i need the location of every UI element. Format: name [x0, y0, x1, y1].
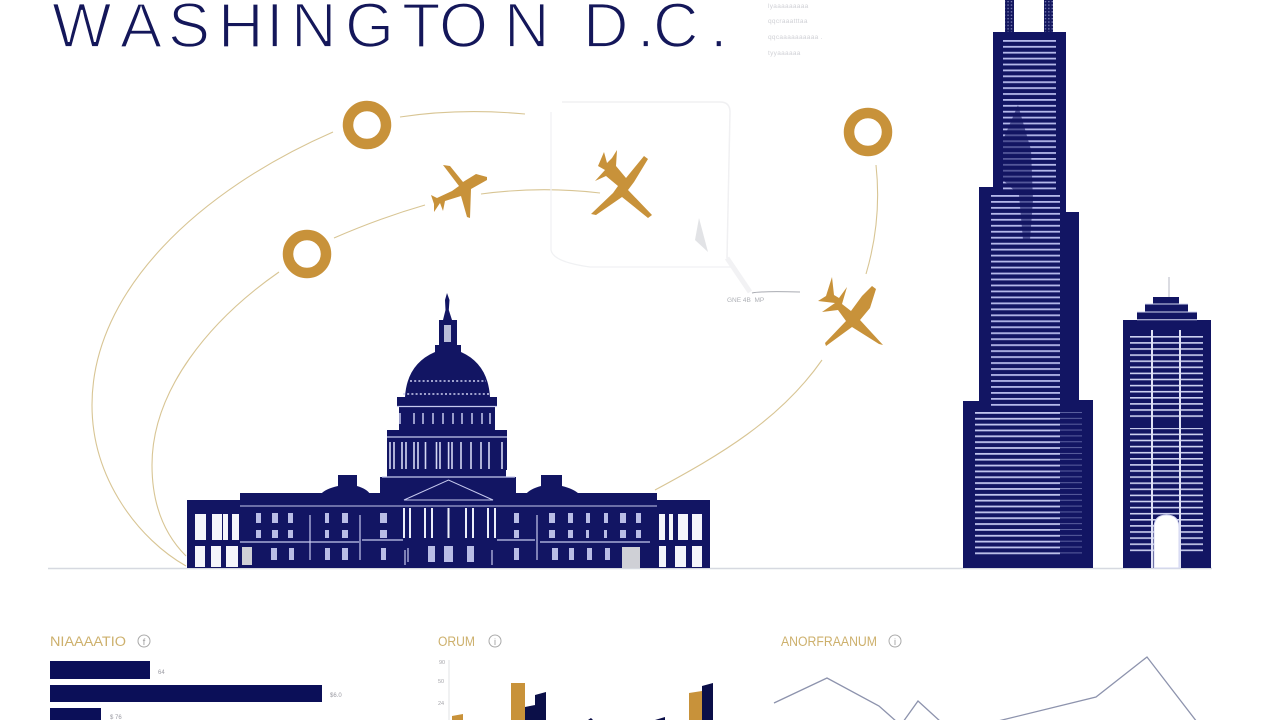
grey door blocks [242, 547, 640, 568]
icon: airplane in card [591, 150, 652, 218]
panel: column chart middle [438, 634, 713, 720]
axis: 50 [438, 679, 444, 685]
axis: 24 [438, 701, 444, 707]
shaded floors [1060, 412, 1082, 558]
drum and colonnades [380, 407, 516, 493]
panel: line chart right [774, 634, 1197, 720]
axis [438, 660, 449, 720]
side domes [321, 475, 370, 494]
tall tower [963, 0, 1093, 568]
callout card [551, 102, 800, 304]
stepped crown [1123, 297, 1211, 568]
tower silhouette [963, 32, 1093, 568]
info icon: i [494, 637, 496, 647]
text block: faint notes [768, 3, 823, 57]
line series [774, 657, 1197, 720]
portico columns [404, 508, 495, 538]
statue and lantern [439, 293, 457, 345]
info icon: i [894, 637, 896, 647]
bar values [110, 670, 342, 720]
gold columns [452, 683, 702, 720]
bar values: $6.0 [330, 693, 342, 699]
capitol building [187, 293, 710, 568]
icon: ring marker left [288, 235, 326, 273]
tower reflection [1003, 105, 1033, 240]
axis: 90 [439, 660, 445, 666]
upper floors [1003, 40, 1056, 190]
info icon: f [143, 637, 146, 647]
arch doorway [1154, 515, 1179, 568]
info icon [489, 635, 501, 647]
heading: ORUM [438, 634, 475, 649]
dome [397, 345, 497, 406]
middle floors [991, 195, 1060, 407]
heading: NIAAAATIO [50, 634, 126, 649]
callout card: GNE 4B MP [727, 297, 764, 304]
pediment [404, 480, 493, 500]
lower floors [975, 412, 1060, 558]
flight route arcs [92, 112, 878, 566]
small tower [1123, 277, 1211, 568]
icon: airplane right [818, 277, 883, 346]
ground line [48, 568, 1212, 570]
antenna [1168, 277, 1170, 297]
facade lines [240, 515, 650, 565]
text block: faint notes: qqcaaaaaaaaaa . [768, 34, 823, 41]
bars [50, 661, 322, 720]
navy columns [525, 683, 713, 720]
info icon [138, 635, 150, 647]
text block: faint notes: lyaaaaaaaaa [768, 3, 809, 10]
text block: faint notes: qqcraaatttaa [768, 18, 808, 25]
bar values: 64 [158, 670, 165, 676]
wing windows [195, 514, 702, 567]
text block: faint notes: tyyaaaaaa [768, 50, 801, 57]
heading: ANORFRAANUM [781, 634, 877, 649]
icon: ring marker top [348, 106, 386, 144]
icon: airplane left [431, 165, 487, 218]
vertical lines [1152, 330, 1180, 568]
antennas [1005, 0, 1014, 32]
panel: bar chart left [50, 634, 342, 720]
info icon [889, 635, 901, 647]
icon: ring marker right [849, 113, 887, 151]
floors [1130, 336, 1203, 554]
main body and wings [187, 493, 710, 568]
facade windows [256, 513, 641, 562]
